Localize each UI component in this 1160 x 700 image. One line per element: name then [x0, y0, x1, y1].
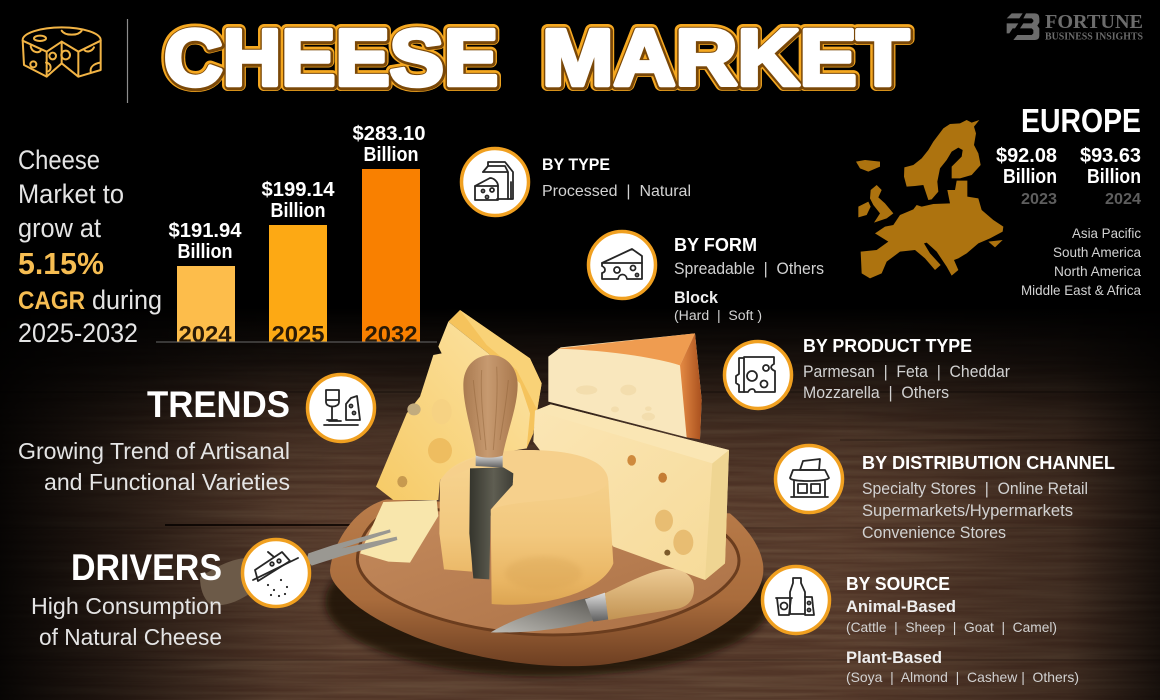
other regions list: South America — [1053, 244, 1141, 260]
header divider — [126, 19, 128, 103]
bar 2025: 2025 — [272, 321, 325, 347]
wooden board — [330, 499, 763, 666]
cheese slice — [360, 500, 438, 563]
segment: by form: BY FORM — [674, 235, 757, 255]
trends: TRENDS — [147, 384, 290, 425]
value 2024: $93.63 — [1080, 145, 1141, 167]
segment: by type: Processed | Natural — [542, 183, 691, 200]
yellow holed cheese wedge — [376, 310, 542, 500]
bar 2025: Billion — [270, 200, 326, 222]
header icon: cheese wheel — [23, 27, 101, 77]
icon: milk bottle and cheese — [762, 566, 830, 634]
round cheese wheel — [439, 450, 613, 605]
segment: by source — [762, 566, 1079, 685]
segment: by source: Plant-Based — [846, 649, 942, 667]
other regions list: Asia Pacific — [1072, 225, 1141, 241]
growth statement: 5.15% — [18, 246, 104, 281]
holed cheese block — [533, 404, 729, 580]
fork — [307, 529, 397, 566]
trends: Growing Trend of Artisanal — [18, 438, 290, 464]
segment: by distribution channel: Convenience Stores — [862, 524, 1006, 542]
segment: by product type: BY PRODUCT TYPE — [803, 336, 972, 356]
growth statement: CAGR — [18, 287, 85, 315]
europe region — [856, 102, 1141, 298]
icon: milk carton and cheese — [462, 148, 528, 216]
bar 2032: 2032 — [364, 321, 418, 347]
drivers — [31, 540, 310, 650]
logo: Fortune Business Insights — [1007, 11, 1143, 42]
segment: by distribution channel — [776, 446, 1115, 542]
value 2024 — [1080, 145, 1141, 208]
bar 2032: $283.10 — [352, 123, 426, 145]
growth statement — [18, 145, 162, 348]
segment: by form — [588, 232, 824, 323]
growth statement: during — [92, 285, 162, 315]
value 2024: Billion — [1087, 166, 1141, 188]
title: CHEESE MARKET: MARKET — [543, 14, 910, 103]
drivers: High Consumption — [31, 593, 222, 619]
title: CHEESE MARKET: CHEESE — [165, 14, 499, 103]
other regions list: North America — [1054, 263, 1141, 279]
trends: and Functional Varieties — [44, 469, 290, 495]
lower cheese knife — [491, 569, 694, 632]
icon: cheese wedge — [588, 232, 656, 298]
bar 2024 — [168, 220, 242, 347]
icon: wine glass and cheese platter — [308, 374, 374, 442]
europe region: EUROPE — [1021, 102, 1141, 139]
segment: by source: (Soya | Almond | Cashew | Others) — [846, 669, 1079, 685]
growth statement: Cheese — [18, 145, 100, 175]
segment: by form: (Hard | Soft ) — [674, 308, 762, 323]
standing knife — [463, 355, 518, 579]
growth statement: 2025-2032 — [18, 318, 138, 348]
map: Europe — [856, 120, 1003, 278]
growth statement: Market to — [18, 179, 124, 209]
logo: Fortune Business Insights: BUSINESS INSIGHTS — [1045, 32, 1143, 42]
bar 2024: Billion — [178, 241, 232, 263]
segment: by form: Spreadable | Others — [674, 260, 824, 278]
segment: by source: BY SOURCE — [846, 574, 950, 594]
bar 2024: 2024 — [178, 321, 232, 347]
fork handle behind drivers text — [200, 558, 252, 605]
growth statement: grow at — [18, 213, 101, 243]
board shadow — [325, 527, 772, 677]
segment: by form: Block — [674, 289, 719, 307]
logo: Fortune Business Insights: FORTUNE — [1045, 11, 1143, 33]
other regions list: Middle East & Africa — [1021, 282, 1141, 298]
bar chart: market size — [156, 123, 437, 347]
segment: by distribution channel: Supermarkets/Hypermarkets — [862, 502, 1073, 520]
segment: by type: BY TYPE — [542, 155, 610, 174]
title: CHEESE MARKET: MARKET — [542, 13, 909, 102]
icon: cheese grater — [242, 540, 310, 606]
icon: cheese shop — [776, 446, 842, 512]
bar 2025 — [262, 179, 335, 347]
value 2023: $92.08 — [996, 145, 1057, 167]
trends — [18, 374, 374, 495]
segment: by product type — [724, 336, 1010, 408]
icon: cheese slices — [724, 342, 792, 408]
drivers: DRIVERS — [71, 547, 222, 588]
drivers: of Natural Cheese — [39, 624, 222, 650]
orange rind cheese wedge — [548, 333, 702, 439]
title: CHEESE MARKET: CHEESE — [164, 13, 498, 102]
segment: by product type: Parmesan | Feta | Cheddar — [803, 363, 1010, 381]
segment: by source: Animal-Based — [846, 598, 956, 616]
title: CHEESE MARKET: CHEESE — [164, 13, 498, 102]
segment: by distribution channel: BY DISTRIBUTION CHANNEL — [862, 453, 1115, 473]
title: CHEESE MARKET — [164, 13, 910, 103]
value 2024: 2024 — [1105, 191, 1141, 208]
bar 2032 — [352, 123, 426, 347]
segment: by product type: Mozzarella | Others — [803, 384, 949, 402]
photo: cheese board with cheeses and knives — [307, 310, 772, 677]
bar 2024: $191.94 — [168, 220, 242, 242]
segment: by source: (Cattle | Sheep | Goat | Camel) — [846, 619, 1057, 635]
title: CHEESE MARKET: MARKET — [542, 13, 909, 102]
bar 2032: Billion — [364, 144, 418, 166]
value 2023: 2023 — [1021, 191, 1057, 208]
value 2023: Billion — [1003, 166, 1057, 188]
segment: by distribution channel: Specialty Stores | Online Retail — [862, 480, 1088, 498]
segment: by type — [462, 148, 691, 216]
bar 2025: $199.14 — [262, 179, 335, 201]
value 2023 — [996, 145, 1057, 208]
other regions list — [1021, 225, 1141, 298]
